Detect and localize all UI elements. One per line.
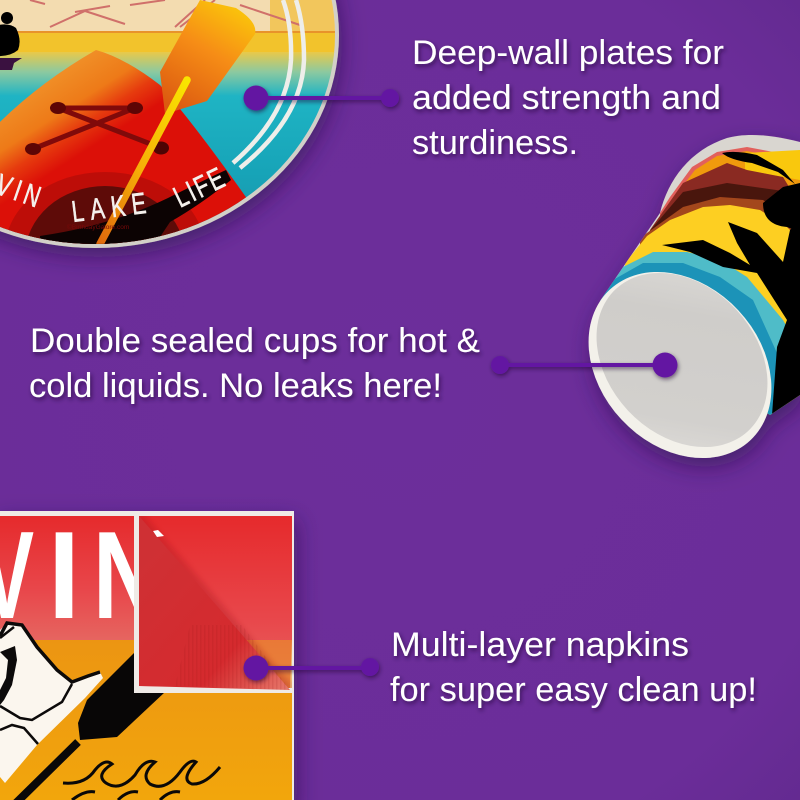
text: napkin layers: for super easy clean up! xyxy=(390,671,757,709)
folded corner red xyxy=(139,516,292,688)
kayak lacing xyxy=(25,102,169,155)
text: cup sealing: Double sealed cups for hot & xyxy=(30,322,480,360)
folded flap xyxy=(139,516,290,690)
plate rim xyxy=(0,0,339,248)
text: napkin layers xyxy=(390,626,757,709)
napkin sheet xyxy=(0,511,294,800)
small white mark xyxy=(153,530,164,537)
plate text xyxy=(0,166,226,222)
watermark: ©BirthdayGalore.com xyxy=(67,223,129,231)
callout: napkin xyxy=(244,656,379,680)
callout: cup xyxy=(491,352,678,378)
napkin lettering: I xyxy=(48,507,80,645)
rim rings xyxy=(233,0,304,168)
napkin red field xyxy=(0,516,292,640)
napkin lettering: N xyxy=(93,507,161,645)
kayak hull xyxy=(0,50,250,260)
text: plate strength: sturdiness. xyxy=(412,124,578,162)
cup body xyxy=(590,130,800,430)
paddle shaft xyxy=(100,80,187,244)
fold shadow xyxy=(139,516,290,690)
text: plate strength xyxy=(412,34,724,162)
paddle blade xyxy=(160,0,255,114)
panel: napkin xyxy=(0,507,294,800)
kayak silhouette figure xyxy=(0,12,22,70)
kayak shade xyxy=(8,170,231,244)
waves xyxy=(63,761,220,800)
text: napkin layers: Multi-layer napkins xyxy=(391,626,689,664)
text: plate strength: Deep-wall plates for xyxy=(412,34,724,72)
panel: cup xyxy=(581,134,800,478)
plate text: LAKE xyxy=(70,185,154,229)
text: cup sealing xyxy=(29,322,480,405)
mountain diamond xyxy=(0,623,103,783)
folded corner base xyxy=(134,511,293,693)
napkin orange field xyxy=(0,640,292,800)
plate artwork xyxy=(0,0,335,244)
figure silhouette xyxy=(722,152,800,232)
flap ribs xyxy=(175,625,290,690)
napkin lettering xyxy=(0,507,161,645)
callout: plate xyxy=(244,86,399,110)
plate text: LIFE xyxy=(168,159,232,214)
text: cup sealing: cold liquids. No leaks here! xyxy=(29,367,442,405)
palm silhouette xyxy=(662,220,800,415)
oar silhouette xyxy=(16,650,165,800)
text: plate strength: added strength and xyxy=(412,79,721,117)
cup base xyxy=(551,235,800,495)
panel: plate xyxy=(0,0,353,268)
